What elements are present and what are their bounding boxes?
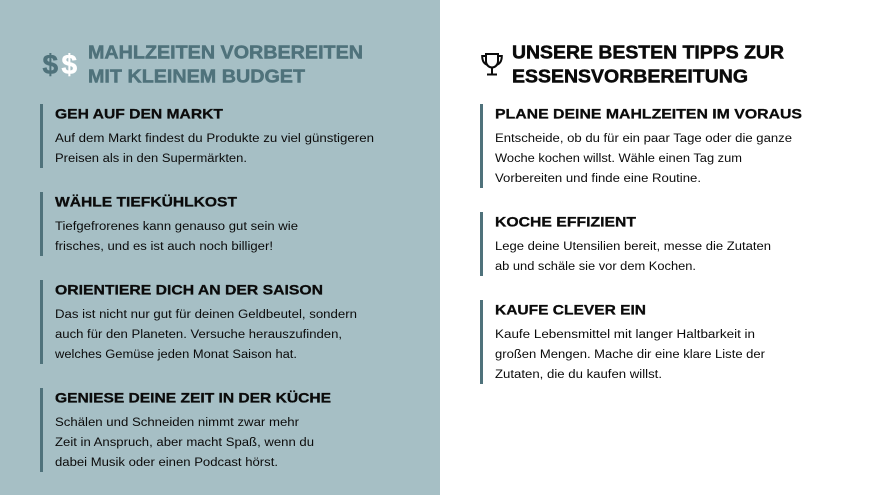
tip: enjoy kitchen time: GENIESE DEINE ZEIT IN DER KÜCHE	[55, 390, 331, 407]
heading: best tips: UNSERE BESTEN TIPPS ZUR	[512, 43, 784, 63]
tip: plan meals: Woche kochen willst. Wähle einen Tag zum	[495, 153, 742, 165]
tip: plan meals: Vorbereiten und finde eine Routine.	[495, 173, 701, 185]
icon: dollar signs: $	[42, 49, 58, 80]
tip: market	[40, 104, 374, 168]
tip: enjoy kitchen time: Schälen und Schneiden nimmt zwar mehr	[55, 417, 299, 429]
tip: seasonal: auch für den Planeten. Versuche herauszufinden,	[55, 329, 342, 341]
tip: seasonal: Das ist nicht nur gut für deinen Geldbeutel, sondern	[55, 309, 357, 321]
heading: budget: MAHLZEITEN VORBEREITEN	[88, 43, 363, 63]
tip: market: GEH AUF DEN MARKT	[55, 107, 223, 123]
tip: frozen food: WÄHLE TIEFKÜHLKOST	[55, 194, 237, 211]
tip: frozen food: Tiefgefrorenes kann genauso gut sein wie	[55, 221, 298, 233]
tip: seasonal: welches Gemüse jeden Monat Saison hat.	[54, 349, 297, 361]
heading: budget: MIT KLEINEM BUDGET	[88, 67, 305, 87]
tip: frozen food: frisches, und es ist auch noch billiger!	[55, 241, 273, 253]
panel: budget background	[0, 0, 440, 495]
tip: plan meals	[480, 104, 802, 188]
tip: frozen food	[40, 192, 298, 256]
tip: buy smart: KAUFE CLEVER EIN	[495, 303, 646, 319]
tip: cook efficiently: KOCHE EFFIZIENT	[495, 215, 636, 231]
tip: market: Auf dem Markt findest du Produkte zu viel günstigeren	[55, 133, 374, 145]
icon: trophy	[482, 54, 502, 74]
heading: best tips: ESSENSVORBEREITUNG	[512, 67, 748, 87]
heading: best tips	[512, 43, 784, 87]
tip: enjoy kitchen time	[40, 388, 331, 472]
panel: best tips	[480, 43, 802, 384]
tip: cook efficiently: ab und schäle sie vor dem Kochen.	[495, 261, 696, 273]
tip: plan meals: Entscheide, ob du für ein paar Tage oder die ganze	[495, 133, 792, 145]
heading: budget	[88, 43, 363, 87]
tip: cook efficiently: Lege deine Utensilien bereit, messe die Zutaten	[495, 241, 771, 253]
tip: plan meals: PLANE DEINE MAHLZEITEN IM VORAUS	[495, 107, 802, 123]
tip: enjoy kitchen time: dabei Musik oder einen Podcast hörst.	[55, 457, 278, 469]
icon: dollar signs: $	[62, 49, 78, 80]
tip: buy smart: Kaufe Lebensmittel mit langer Haltbarkeit in	[495, 329, 755, 341]
tip: enjoy kitchen time: Zeit in Anspruch, aber macht Spaß, wenn du	[55, 437, 314, 449]
icon: dollar signs	[42, 49, 78, 80]
tip: buy smart: Zutaten, die du kaufen willst.	[495, 369, 662, 381]
tip: seasonal: ORIENTIERE DICH AN DER SAISON	[55, 283, 323, 299]
tip: market: Preisen als in den Supermärkten.	[55, 153, 247, 165]
tip: buy smart	[480, 300, 765, 384]
tip: cook efficiently	[480, 212, 771, 276]
tip: buy smart: großen Mengen. Mache dir eine klare Liste der	[495, 349, 765, 361]
panel: budget meal prep	[40, 43, 374, 472]
tip: seasonal	[40, 280, 357, 364]
